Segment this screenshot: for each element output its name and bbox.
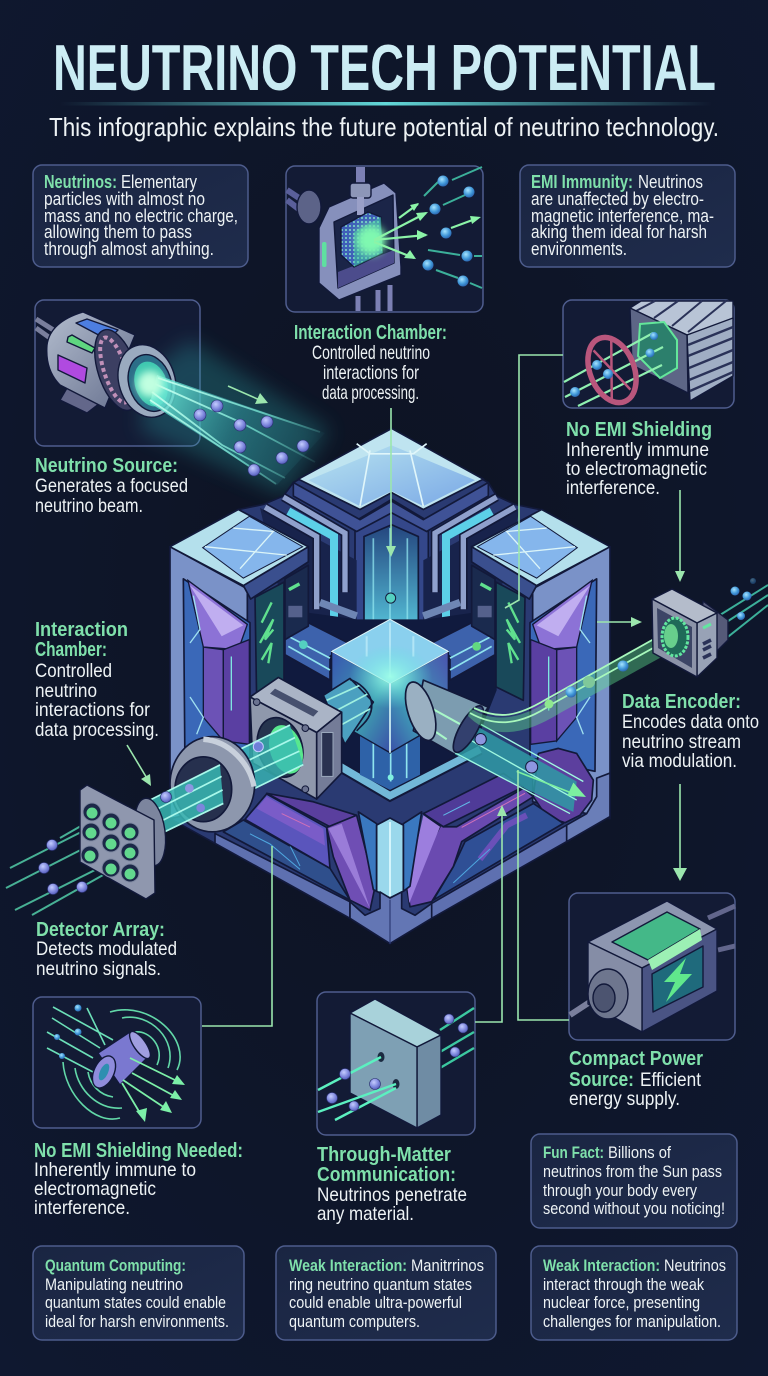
info box: fun fact: Billions of	[608, 1143, 671, 1162]
info box: quantum computing: quantum states could enable	[45, 1293, 226, 1312]
label: no EMI shielding needed: electromagnetic	[34, 1178, 156, 1200]
label: compact power source: energy supply.	[569, 1088, 680, 1110]
info box: fun fact: second without you noticing!	[543, 1199, 725, 1218]
icon: detector array	[6, 785, 172, 915]
info box: fun fact	[531, 1134, 737, 1228]
label: through-matter communication	[317, 1143, 467, 1225]
label: data encoder	[622, 690, 759, 772]
center ledge and pillar	[328, 749, 480, 944]
label: through-matter communication: any material.	[317, 1203, 414, 1225]
info box: weak interaction middle: Weak Interaction:	[289, 1256, 407, 1275]
label: no EMI shielding: No EMI Shielding	[566, 418, 712, 441]
label: compact power source: Source:	[569, 1068, 634, 1091]
left tube and flange	[238, 677, 373, 799]
label: detector array: Detects modulated	[36, 938, 177, 960]
panel: through-matter illustration	[317, 992, 475, 1135]
panel: interaction chamber illustration	[286, 166, 483, 312]
label: compact power source: Compact Power	[569, 1047, 703, 1070]
info box: weak interaction middle: could enable ultra-powerful	[289, 1293, 462, 1312]
label: interaction chamber left: Controlled	[35, 660, 112, 682]
label: data encoder: via modulation.	[622, 750, 737, 772]
info box: neutrinos: through almost anything.	[44, 239, 214, 259]
label: interaction chamber top	[294, 321, 447, 404]
lower tray right	[407, 748, 610, 918]
label: neutrino source: Neutrino Source:	[35, 454, 178, 477]
rear channel	[355, 499, 428, 636]
label: interaction chamber top: Controlled neutrino	[312, 342, 430, 364]
label: interaction chamber left	[35, 618, 159, 741]
label: no EMI shielding: Inherently immune	[566, 439, 709, 461]
panel: no EMI shielding illustration	[563, 300, 734, 410]
panel: no EMI shielding needed illustration	[33, 997, 201, 1128]
green modulated beam to encoder	[468, 629, 678, 732]
info box: fun fact: neutrinos from the Sun pass	[543, 1162, 722, 1181]
label: interaction chamber left: neutrino	[35, 680, 97, 702]
info box: quantum computing: ideal for harsh environments.	[45, 1312, 229, 1331]
info box: neutrinos	[33, 165, 248, 267]
icon: data encoder	[652, 578, 768, 677]
label: no EMI shielding: interference.	[566, 477, 660, 499]
info box: weak interaction right: interact through the weak	[543, 1275, 704, 1294]
info box: EMI immunity: EMI Immunity:	[531, 172, 633, 192]
info box: EMI immunity: magnetic interference, ma-	[531, 206, 714, 226]
label: detector array: neutrino signals.	[36, 958, 161, 980]
right tube and arrow beam	[399, 678, 586, 814]
info box: neutrinos: mass and no electric charge,	[44, 206, 238, 226]
info box: EMI immunity: environments.	[531, 239, 627, 259]
label: interaction chamber top: Interaction Chamber:	[294, 321, 447, 344]
ring and outer beam	[147, 737, 255, 839]
central neutrino detector cube	[147, 428, 610, 944]
panel: compact power source illustration	[569, 893, 735, 1040]
label: through-matter communication: Through-Matter	[317, 1143, 451, 1166]
top crystal	[293, 428, 488, 531]
info box: weak interaction right: nuclear force, presenting	[543, 1293, 700, 1312]
label: no EMI shielding needed: No EMI Shielding Needed:	[34, 1139, 243, 1162]
label: no EMI shielding needed: interference.	[34, 1197, 130, 1219]
info box: weak interaction middle: quantum computers.	[289, 1312, 420, 1331]
info box: neutrinos: Elementary	[121, 172, 197, 192]
label: data encoder: Data Encoder:	[622, 690, 741, 713]
center cube	[332, 619, 448, 790]
dark cavity	[283, 609, 497, 798]
label: through-matter communication: Neutrinos penetrate	[317, 1184, 467, 1206]
label: compact power source: Efficient	[640, 1069, 702, 1091]
label: interaction chamber left: data processing.	[35, 719, 159, 741]
side beams	[285, 619, 495, 680]
label: detector array: Detector Array:	[36, 918, 165, 941]
label: interaction chamber top: interactions for	[323, 362, 419, 384]
connector arrows	[127, 355, 687, 1026]
info box: weak interaction right: challenges for manipulation.	[543, 1312, 721, 1331]
left pillar block	[170, 510, 308, 819]
label: interaction chamber left: Chamber:	[35, 638, 107, 661]
label: data encoder: neutrino stream	[622, 731, 741, 753]
lower tray left	[215, 793, 375, 918]
label: no EMI shielding needed: Inherently immune to	[34, 1159, 196, 1181]
info box: weak interaction right: Neutrinos	[664, 1256, 726, 1275]
label: neutrino source	[35, 454, 188, 517]
info box: quantum computing: Quantum Computing:	[45, 1256, 186, 1275]
label: neutrino source: Generates a focused	[35, 475, 188, 497]
label: neutrino source: neutrino beam.	[35, 495, 143, 517]
info box: quantum computing	[33, 1246, 244, 1340]
label: no EMI shielding: to electromagnetic	[566, 458, 707, 480]
info box: EMI immunity	[520, 165, 735, 267]
info box: weak interaction middle	[276, 1246, 496, 1340]
label: compact power source	[569, 1047, 703, 1110]
label: interaction chamber left: Interaction	[35, 618, 128, 641]
info box: EMI immunity: are unaffected by electro-	[531, 189, 704, 209]
info box: EMI immunity: Neutrinos	[638, 172, 703, 192]
info box: neutrinos: Neutrinos:	[44, 172, 117, 192]
info box: neutrinos: allowing them to pass	[44, 222, 192, 242]
info box: EMI immunity: aking them ideal for harsh	[531, 222, 707, 242]
info box: fun fact: through your body every	[543, 1181, 697, 1200]
label: no EMI shielding needed	[34, 1139, 243, 1219]
label: no EMI shielding	[566, 418, 712, 499]
label: interaction chamber left: interactions for	[35, 699, 150, 721]
label: interaction chamber top: data processing.	[322, 382, 419, 404]
label: through-matter communication: Communication:	[317, 1163, 456, 1186]
info box: weak interaction right	[531, 1246, 737, 1340]
info box: weak interaction middle: ring neutrino quantum states	[289, 1275, 472, 1294]
info box: weak interaction right: Weak Interaction:	[543, 1256, 660, 1275]
info box: quantum computing: Manipulating neutrino	[45, 1275, 183, 1294]
info box: neutrinos: particles with almost no	[44, 189, 205, 209]
label: detector array	[36, 918, 177, 980]
stepped side plates	[260, 497, 357, 623]
info box: fun fact: Fun Fact:	[543, 1143, 604, 1162]
panel: neutrino source illustration	[35, 300, 330, 495]
info box: weak interaction middle: Manitrrinos	[411, 1256, 484, 1275]
